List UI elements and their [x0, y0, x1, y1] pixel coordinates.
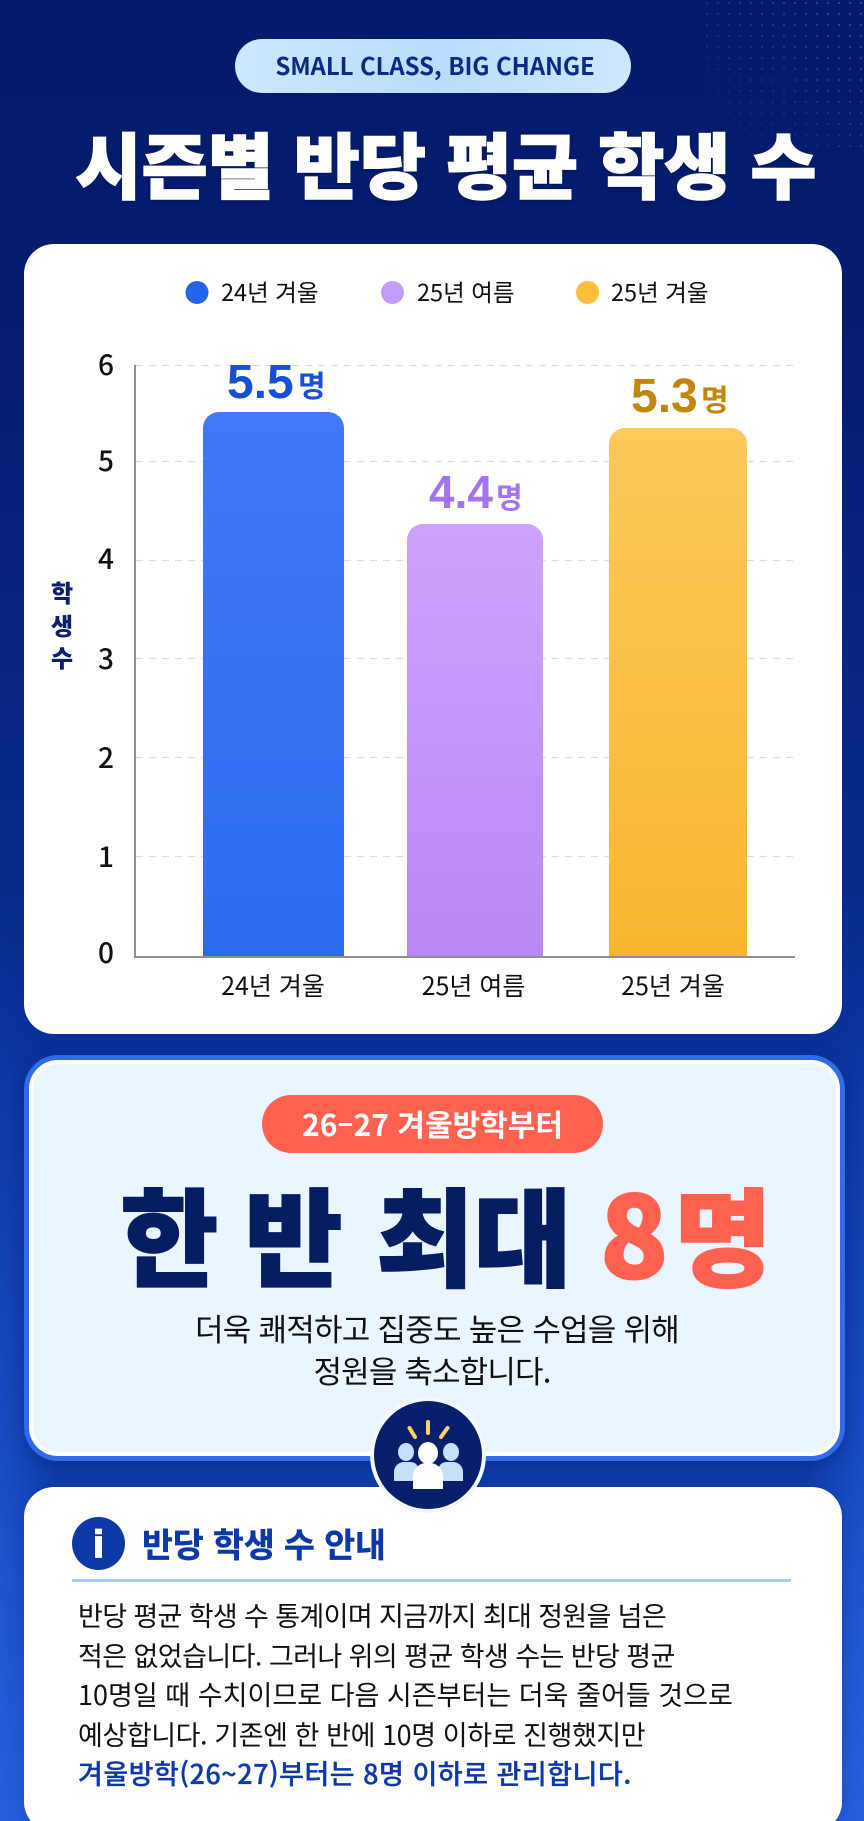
bar: 25년 겨울: [609, 428, 747, 957]
description text: [195, 1305, 679, 1392]
value label: 4.4명: 4.4: [429, 466, 493, 518]
y axis title: [51, 574, 73, 674]
y axis tick labels: 2: [98, 737, 114, 777]
notice body text: 겨울방학(26~27)부터는 8명 이하로 관리합니다.: [78, 1753, 632, 1792]
bar: 25년 여름: [407, 524, 543, 957]
headline: 한 반 최대 8명: 한 반 최대 8명: [120, 1149, 772, 1311]
y axis tick labels: 1: [98, 836, 114, 876]
notice body text: 반당 평균 학생 수 통계이며 지금까지 최대 정원을 넘은: [78, 1595, 666, 1634]
notice body text: [78, 1595, 733, 1792]
title: 시즌별 반당 평균 학생 수: [76, 110, 816, 214]
value label: 4.4명: 명: [496, 475, 523, 517]
legend: [186, 274, 709, 308]
notice body text: 적은 없었습니다. 그러나 위의 평균 학생 수는 반당 평균: [78, 1634, 675, 1674]
panel: 8 person announcement card: [24, 1055, 845, 1461]
panel: bar chart card: [24, 244, 842, 1034]
y axis tick labels: 0: [98, 932, 114, 972]
legend: 24년 겨울: [221, 274, 319, 308]
badge: 26-27 겨울방학부터: 26–27 겨울방학부터: [302, 1101, 563, 1145]
y axis title: 생: [51, 607, 73, 642]
icon: group of students: [370, 1397, 486, 1513]
y axis tick labels: 4: [98, 538, 114, 578]
top badge: SMALL CLASS, BIG CHANGE: [235, 39, 631, 93]
badge: 26-27 겨울방학부터: [262, 1095, 603, 1153]
x axis labels: 24년 겨울: [221, 967, 325, 1003]
y axis title: 학: [51, 574, 73, 609]
y axis tick labels: 5: [98, 440, 114, 480]
notice body text: 예상합니다. 기존엔 한 반에 10명 이하로 진행했지만: [78, 1714, 645, 1752]
y axis title: 수: [51, 639, 73, 674]
legend: 25년 여름: [417, 274, 515, 308]
icon: info: i: [93, 1524, 104, 1566]
y axis tick labels: 3: [98, 638, 114, 678]
x axis labels: [221, 967, 725, 1003]
icon: info: [72, 1517, 125, 1570]
panel: student notice card: [24, 1487, 842, 1821]
top badge: SMALL CLASS, BIG CHANGE: SMALL CLASS, BIG CHANGE: [275, 47, 595, 82]
notice body text: 10명일 때 수치이므로 다음 시즌부터는 더욱 줄어들 것으로: [78, 1674, 733, 1713]
y axis tick labels: 6: [98, 344, 114, 384]
legend: 25년 겨울: [611, 274, 709, 308]
y axis tick labels: [98, 344, 114, 972]
description text: 정원을 축소합니다.: [314, 1347, 550, 1392]
value label: 5.5명: 명: [298, 362, 326, 406]
bar: 24년 겨울: [203, 412, 344, 957]
value label: 5.3명: 명: [701, 376, 729, 420]
value label: 5.3명: 5.3: [631, 370, 698, 423]
value label: 5.5명: 5.5: [227, 356, 294, 409]
x axis labels: 25년 겨울: [621, 967, 725, 1003]
description text: 더욱 쾌적하고 집중도 높은 수업을 위해: [195, 1305, 679, 1350]
x axis labels: 25년 여름: [422, 967, 525, 1003]
notice heading: 반당 학생 수 안내: [142, 1518, 386, 1567]
